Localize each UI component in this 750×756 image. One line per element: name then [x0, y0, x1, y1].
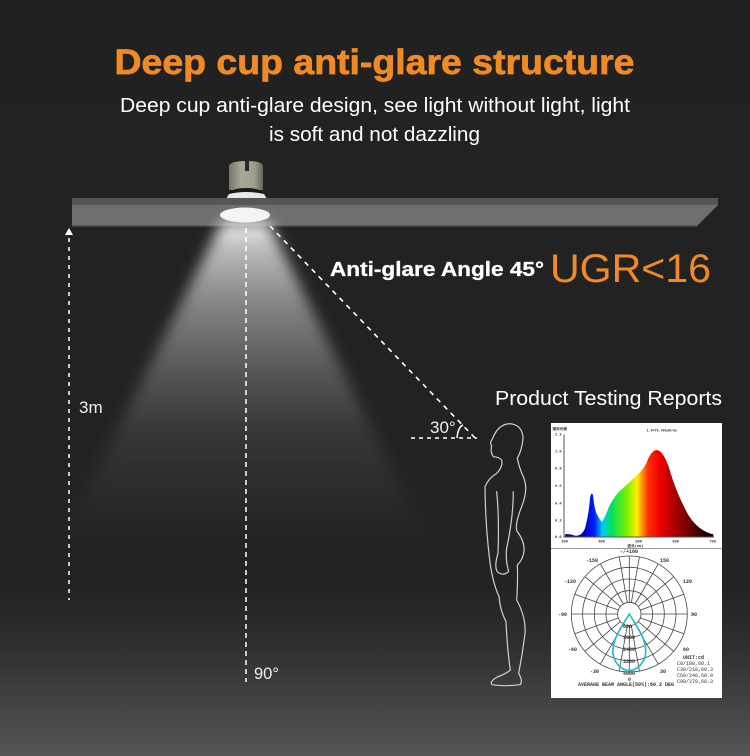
center dashed line — [245, 228, 247, 682]
polar labels: C60/240,60.0 — [677, 673, 713, 679]
polar labels: 600 — [623, 624, 632, 630]
spectrum axis labels: 波长(nm) — [627, 543, 643, 549]
polar labels: UNIT:cd — [683, 655, 704, 661]
height label: 3m — [79, 398, 103, 417]
polar labels: -150 — [586, 558, 598, 564]
polar labels: 120 — [683, 579, 692, 585]
spectrum axis labels: 0.8 — [555, 468, 562, 472]
polar labels: AVERAGE BEAM ANGLE(50%):60.2 DEG — [578, 682, 674, 688]
polar labels: 60 — [683, 647, 689, 653]
separator — [551, 548, 722, 550]
subtitle — [120, 95, 630, 146]
beam distribution curve — [613, 614, 646, 670]
spectrum axis labels: 1.2 — [555, 434, 562, 438]
polar labels: 1000 — [623, 635, 635, 641]
polar labels: -120 — [564, 579, 576, 585]
reports heading: Product Testing Reports — [495, 388, 722, 410]
polar labels: 90 — [691, 612, 697, 618]
polar labels: 3200 — [623, 659, 635, 665]
title: Deep cup anti-glare structure — [114, 43, 634, 82]
spectrum axis labels: 0.0 — [555, 536, 562, 540]
spectrum axis labels: 700 — [709, 540, 716, 544]
polar labels: C30/210,60.3 — [677, 667, 713, 673]
spectrum axis labels: 0.2 — [555, 519, 562, 523]
spectrum curve — [565, 450, 713, 537]
spectrum axis labels: 1.0 — [555, 450, 562, 454]
spectrum axis labels: 300 — [561, 540, 568, 544]
polar labels: -/+180 — [620, 549, 638, 555]
spectrum axis labels: 400 — [598, 540, 605, 544]
light beam — [62, 222, 428, 540]
90 degree label: 90° — [254, 665, 279, 683]
polar labels — [558, 549, 713, 688]
polar labels: -60 — [568, 647, 577, 653]
polar labels: -30 — [590, 669, 599, 675]
spectrum axis labels — [552, 426, 716, 549]
UGR label: UGR<16 — [550, 247, 711, 291]
lamp opening — [220, 208, 270, 222]
polar labels: 150 — [660, 558, 669, 564]
polar chart — [571, 556, 687, 672]
polar labels: 30 — [660, 669, 666, 675]
polar labels: 0 — [628, 677, 631, 683]
height arrow — [65, 228, 73, 600]
spectrum chart — [552, 426, 716, 549]
horizontal dashed line — [411, 437, 477, 439]
polar labels: 4000 — [623, 671, 635, 677]
spectrum axis labels: 0.4 — [555, 502, 562, 506]
subtitle: Deep cup anti-glare design, see light without light, light — [120, 95, 630, 117]
30 degree label: 30° — [430, 418, 456, 437]
report sheet — [551, 423, 722, 698]
icon: downlight fixture — [226, 161, 267, 199]
angle arc — [457, 425, 463, 438]
spectrum axis labels: 600 — [672, 540, 679, 544]
polar labels: 2400 — [623, 647, 635, 653]
diagonal dashed line — [270, 226, 475, 438]
polar labels: -90 — [558, 612, 567, 618]
spectrum axis labels: 500 — [635, 540, 642, 544]
polar labels: C0/180,60.1 — [677, 661, 710, 667]
anti-glare label: Anti-glare Angle 45° — [330, 259, 544, 281]
spectrum axis labels: 1.0=75.401mW/nm — [647, 429, 677, 433]
polar labels: C90/270,60.3 — [677, 679, 713, 685]
spectrum axis labels: 0.6 — [555, 485, 562, 489]
subtitle: is soft and not dazzling — [269, 124, 480, 146]
spectrum axis labels: 相对光谱 — [552, 426, 567, 432]
ceiling panel — [72, 198, 718, 226]
human silhouette — [485, 424, 526, 686]
